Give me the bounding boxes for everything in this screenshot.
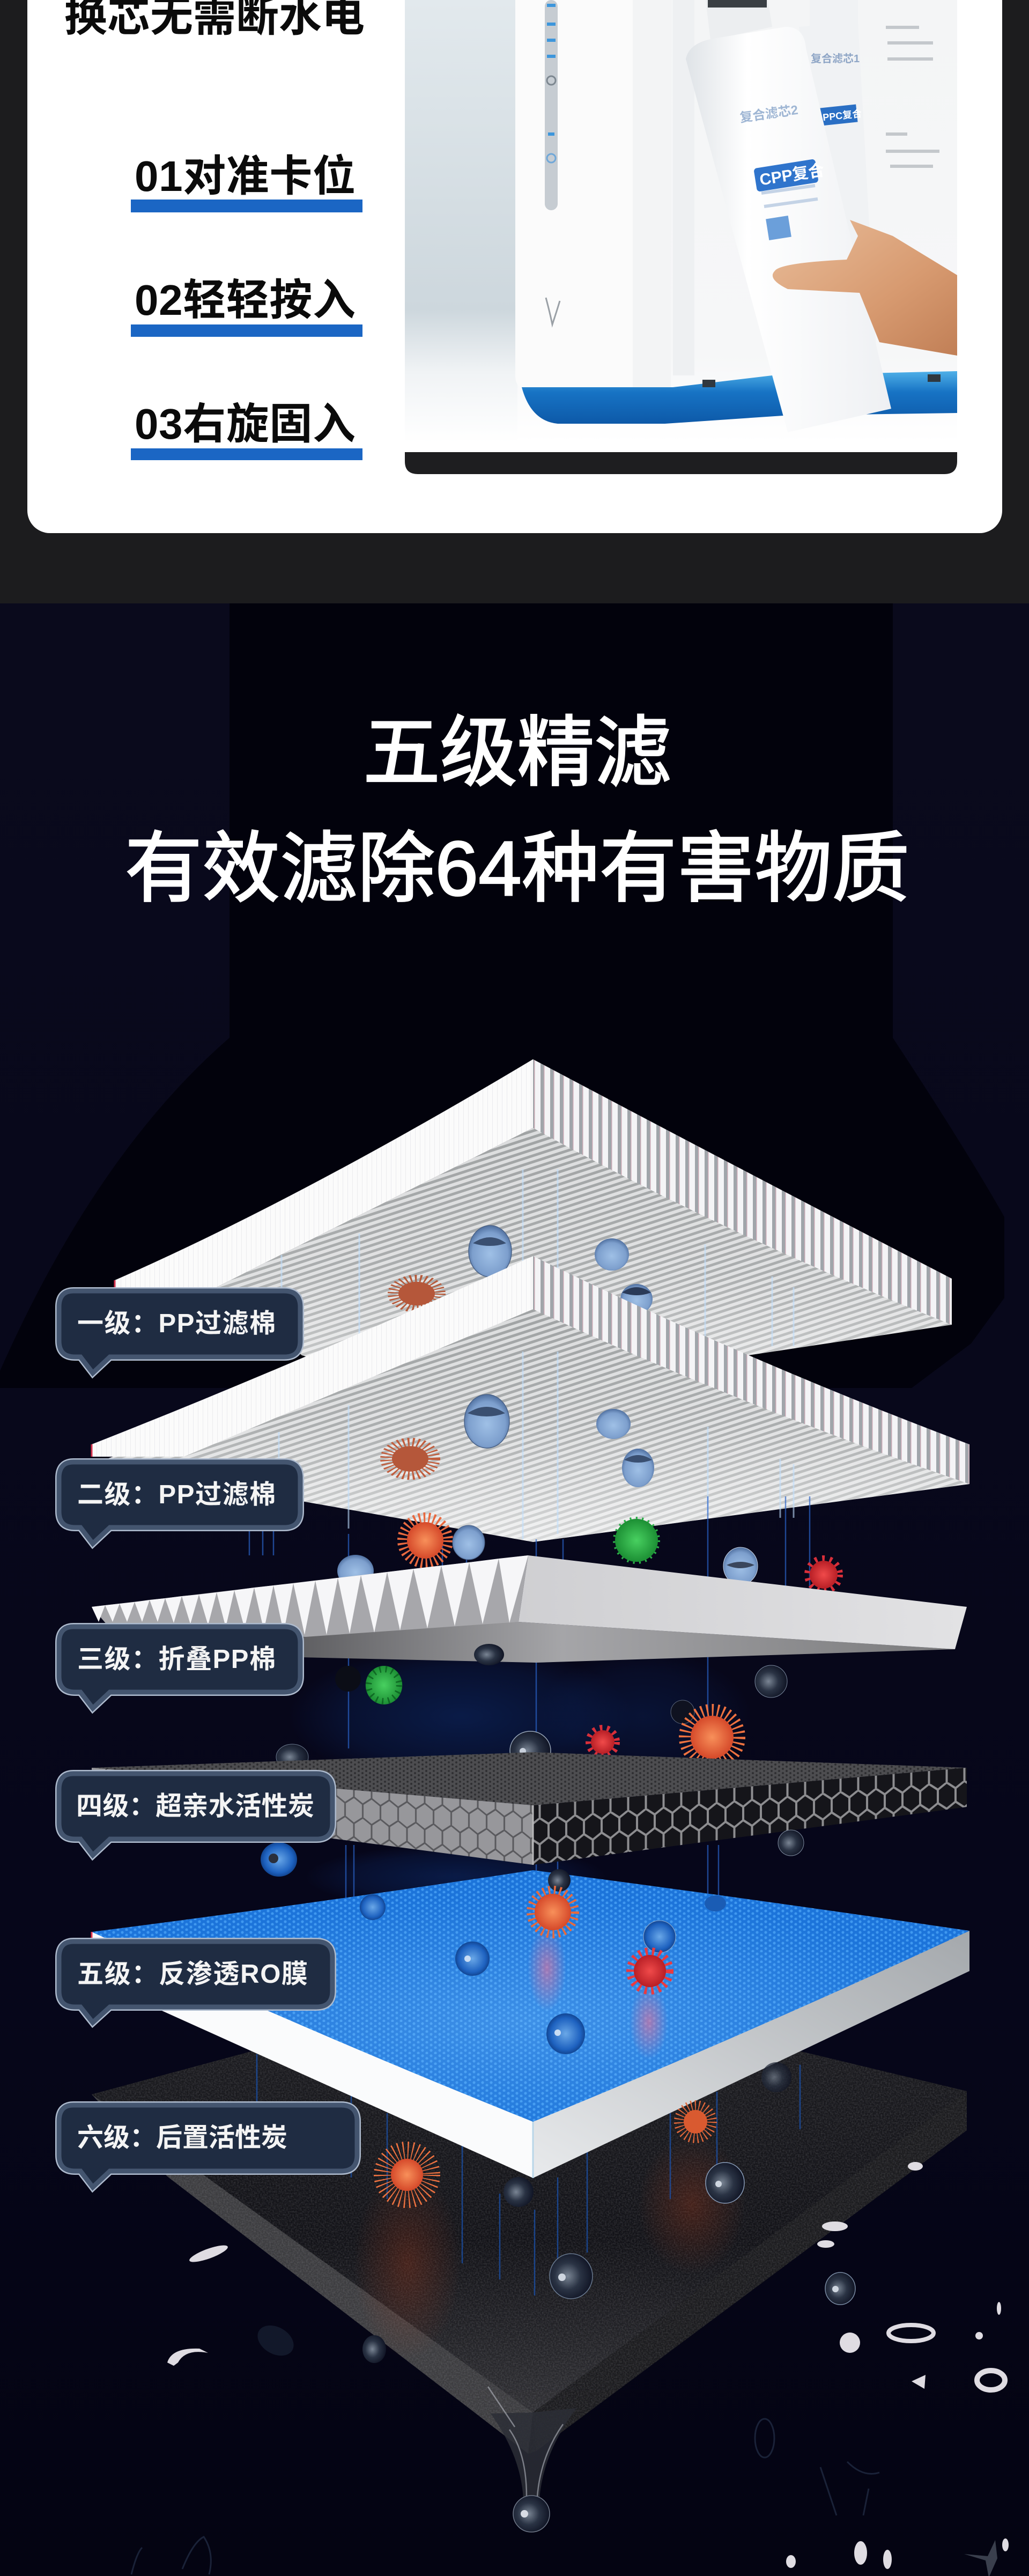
photo bar: [405, 452, 957, 474]
title: 有效滤除64种有害物质: [125, 825, 909, 912]
panel: replacement card: [27, 0, 1002, 533]
bacteria and drops beneath membrane: [252, 2062, 855, 2363]
bottom water bead: [513, 2496, 550, 2532]
front cartridge: [686, 0, 891, 432]
step 03: 03右旋固入: [135, 400, 356, 448]
photo: water purifier with hand inserting filter: PPC复合: [822, 108, 862, 123]
label: level 1: 一级：PP过滤棉: [77, 1309, 276, 1338]
blue base: [522, 371, 957, 424]
logo on body: [546, 298, 560, 324]
water splash fragments: [167, 2162, 1009, 2569]
section background: dark filter stage: [0, 603, 1029, 2576]
light rays through layer 6: [257, 2054, 800, 2295]
faint water marks: [131, 2419, 879, 2574]
label: level 6: 六级：后置活性炭: [77, 2123, 287, 2152]
label: level 3: 三级：折叠PP棉: [77, 1645, 276, 1674]
water drops and bacteria on layer 1: [396, 1226, 653, 1314]
step 01: 01对准卡位: [135, 152, 356, 200]
label: level 6: [59, 2105, 357, 2187]
label: level 4: 四级：超亲水活性炭: [76, 1792, 314, 1821]
label: level 3: [59, 1627, 300, 1708]
label: level 4: [59, 1774, 332, 1855]
label: level 5: [59, 1942, 332, 2023]
filter layer 6: post activated carbon: [92, 1984, 967, 2499]
bacteria and drops between layer 2 and layer 3: [337, 1519, 838, 1589]
step 02: 02轻轻按入: [135, 276, 356, 324]
display strip: [545, 0, 558, 210]
faint star splash: [964, 2540, 997, 2576]
label: level 5: 五级：反渗透RO膜: [77, 1960, 308, 1989]
background dark shape: [0, 603, 1004, 1388]
label: level 2: [59, 1462, 300, 1544]
bacteria and drops between layer 3 and layer 4: [276, 1644, 787, 1801]
filter layer 3: folded PP cotton: [92, 1555, 967, 1663]
filter layer 2: PP cotton: [92, 1256, 969, 1542]
drops near layer 4: [261, 1830, 804, 1877]
back cartridge: [799, 21, 879, 413]
filter layer 5: reverse osmosis membrane: [92, 1870, 969, 2178]
filter layer 4: activated carbon honeycomb: [92, 1752, 967, 1865]
water drip: [491, 2408, 576, 2499]
hand: [773, 220, 957, 356]
title: 五级精滤: [363, 710, 671, 796]
photo: water purifier with hand inserting filter: 复合滤芯1: [811, 53, 860, 65]
label: level 1: [59, 1291, 300, 1373]
water drops and bacteria on layer 2: [389, 1394, 654, 1487]
label: level 2: 二级：PP过滤棉: [77, 1480, 276, 1509]
top section background: [0, 0, 1029, 603]
light rays: [249, 1496, 810, 2092]
front cartridge: CPP复合: [758, 161, 826, 189]
purifier body: [515, 0, 517, 383]
bacteria and drops on membrane: [360, 1869, 726, 2060]
filter layer 1: PP cotton: [115, 1059, 952, 1421]
title: [125, 710, 909, 912]
pleats: [92, 1555, 528, 1635]
photo: water purifier with hand inserting filter: [405, 0, 957, 452]
front cartridge: 复合滤芯2: [739, 103, 799, 126]
